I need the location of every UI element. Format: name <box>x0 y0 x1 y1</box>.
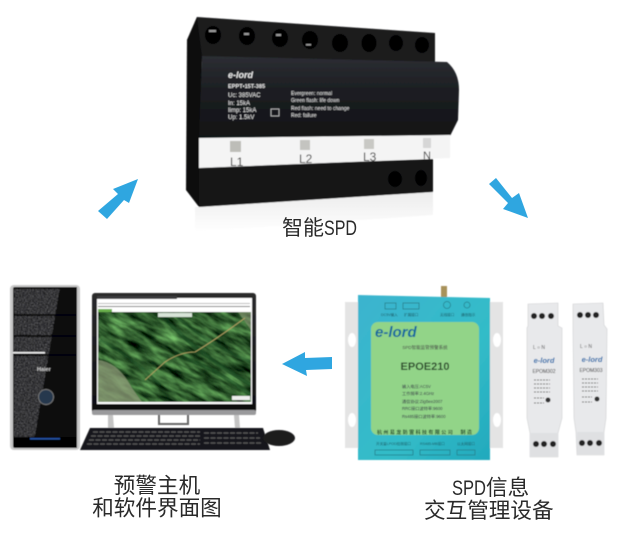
port labels: 通信指示 <box>461 312 476 317</box>
caption: SPD info: 交互管理设备 <box>424 498 554 523</box>
product label: Red: failure <box>291 113 317 119</box>
antenna <box>441 286 447 297</box>
specs: RRC接口波特率:9600 <box>402 405 443 412</box>
ports <box>375 302 475 455</box>
product label: Red flash: need to change <box>291 106 350 112</box>
port labels: 无线接口 <box>440 312 455 317</box>
arrow: down right <box>489 178 528 218</box>
module EPOM302: EPOM302 <box>532 369 556 375</box>
arrow: left <box>282 352 332 376</box>
module EPOM302: L ○ N <box>533 345 545 351</box>
product label: Evergreen: normal <box>291 91 332 97</box>
terminal block <box>187 17 435 66</box>
port labels <box>376 312 476 446</box>
reflection <box>195 192 433 232</box>
front cover <box>199 56 459 138</box>
caption: warning host: 和软件界面图 <box>92 496 222 520</box>
company: 杭州易龙防雷科技有限公司 制造 <box>377 429 472 436</box>
product label: Up: 1.5kV <box>228 115 254 121</box>
terminals <box>205 26 429 53</box>
module EPOM303: L ○ N <box>580 344 592 350</box>
band labels: N <box>423 150 431 162</box>
specs: 工作频率:2.4GHz <box>402 390 434 397</box>
module EPOM303: e-lord <box>582 355 603 364</box>
brand: Haier <box>37 367 52 373</box>
mounting brackets <box>345 302 503 448</box>
EPOE210 device: SPD智能监管预警系统 <box>402 344 448 351</box>
specs: 通信协议:ZigBee2007 <box>402 398 443 405</box>
port labels: 扩展接口 <box>404 312 419 317</box>
caption: warning host: 预警主机 <box>114 473 201 498</box>
caption: smart SPD: 智能 <box>282 217 324 240</box>
SPD device <box>186 17 459 232</box>
band labels <box>230 150 431 169</box>
product label: Green flash: life down <box>291 98 340 104</box>
mouse <box>263 430 295 446</box>
computer tower <box>10 285 80 450</box>
arrow: up right <box>98 179 138 219</box>
model: EPOE210 <box>401 361 449 373</box>
specs <box>402 383 446 420</box>
indicators <box>230 141 241 152</box>
caption: SPD info: 信息 <box>486 475 529 500</box>
bottom block <box>199 159 433 207</box>
sensor modules <box>527 303 607 457</box>
product label: In: 15kA <box>228 101 250 107</box>
band labels: L1 <box>230 155 244 169</box>
brand: e-lord <box>375 324 418 341</box>
keyboard <box>80 428 270 450</box>
specs: Rs485接口波特率:9600 <box>402 413 446 420</box>
caption: smart SPD <box>282 217 357 240</box>
satellite map <box>97 311 252 403</box>
terminal glints <box>209 30 311 46</box>
caption: smart SPD: SPD <box>324 217 357 240</box>
module EPOM302 <box>527 303 562 457</box>
module EPOM303: EPOM303 <box>579 368 603 374</box>
product label: Iimp: 15kA <box>228 108 256 114</box>
product label: Uc: 385VAC <box>228 93 261 99</box>
lower terminals <box>388 171 402 187</box>
port labels: RS485-MB接口 <box>420 441 445 446</box>
port labels: DC5V输入 <box>381 312 398 317</box>
caption: SPD info <box>424 475 554 523</box>
teal case <box>358 295 490 460</box>
caption: SPD info: SPD <box>452 475 486 500</box>
green panel <box>371 322 479 435</box>
module EPOM303 <box>573 303 607 455</box>
port labels: 以太网接口 <box>457 441 475 446</box>
product label <box>228 70 350 121</box>
band labels: L2 <box>299 152 313 166</box>
port labels: 开关量LPOD检测接口 <box>376 441 411 446</box>
monitor <box>91 292 257 428</box>
toolbar <box>97 296 177 299</box>
power button <box>38 390 54 404</box>
product label: e-lord <box>228 70 254 80</box>
stand <box>108 415 114 428</box>
left side <box>186 17 202 207</box>
specs: 输入电压:AC5V <box>402 383 431 390</box>
band labels: L3 <box>363 150 377 164</box>
module EPOM302: e-lord <box>534 356 555 365</box>
product label: EPPT•15T-385 <box>228 84 265 90</box>
white status band <box>199 135 450 168</box>
caption: warning host <box>92 473 222 520</box>
EPOE210 device <box>345 286 503 460</box>
